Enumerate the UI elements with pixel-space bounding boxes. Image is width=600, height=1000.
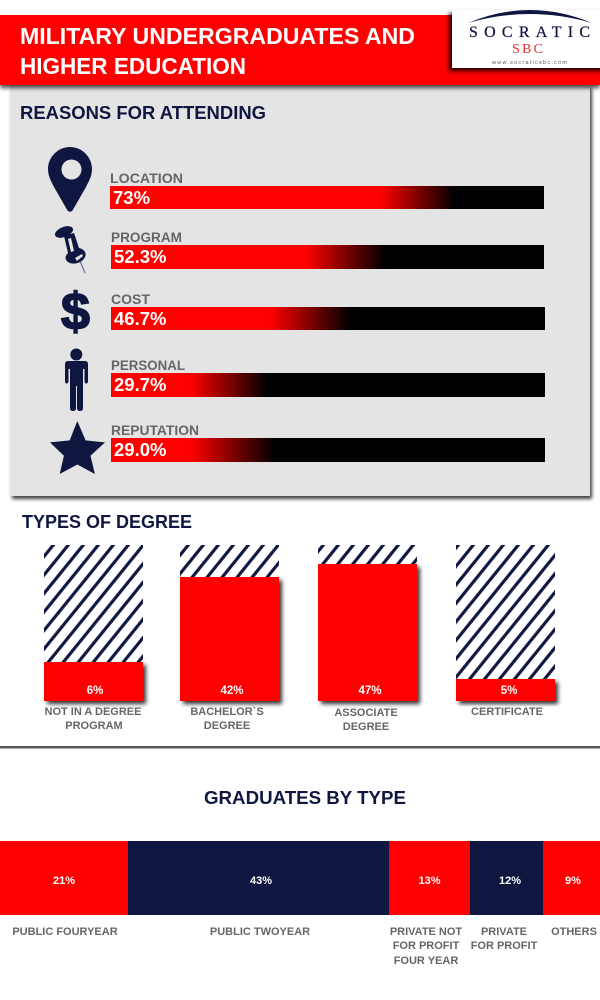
segment: others [543,841,600,938]
segment: private for profit: 12% [499,875,521,887]
label: cost: COST [111,292,151,307]
chart: graduates by type [0,841,600,967]
column: certificate: CERTIFICATE [471,706,543,718]
icon: person [65,348,88,411]
segment: public two-year [128,841,389,938]
column: not in a degree program [44,545,143,732]
value: 73%: 73% [113,187,150,208]
column: bachelor's degree: BACHELOR`S [190,706,264,718]
icon: dollar sign: $ [61,283,90,341]
logo: Socratic SBC [452,10,600,68]
column: associate degree [318,545,417,733]
heading: types of degree: TYPES OF DEGREE [22,512,192,532]
title: HIGHER EDUCATION [20,53,246,79]
value: 52.3%: 52.3% [114,246,166,267]
segment: others: OTHERS [551,926,597,938]
label: reputation: REPUTATION [111,423,199,438]
bar: location 73% [110,186,544,209]
column: bachelor's degree: 42% [220,685,244,697]
segment: others: 9% [565,875,581,887]
label: location: LOCATION [110,171,183,186]
icon: push pin [53,224,86,273]
chart: types of degree [44,545,555,733]
value: 29.7%: 29.7% [114,374,166,395]
column: not in a degree program: 6% [87,685,103,697]
heading: reasons for attending: REASONS FOR ATTENDING [20,103,266,123]
column: certificate: 5% [501,685,517,697]
logo: Socratic SBC: SBC [512,42,543,57]
segment: private not for profit four year: FOR PROFIT [393,940,460,952]
bar: personal 29.7% [111,373,545,397]
segment: private not for profit four year: FOUR YEAR [394,955,458,967]
segment: public four-year: PUBLIC FOURYEAR [12,926,118,938]
column: associate degree: DEGREE [343,721,389,733]
bar: cost 46.7% [111,307,545,330]
label: program: PROGRAM [111,230,182,245]
segment: public four-year [0,841,128,938]
header banner [0,15,600,85]
column: not in a degree program: NOT IN A DEGREE [45,706,141,718]
column: associate degree: ASSOCIATE [334,707,398,719]
value: 46.7%: 46.7% [114,308,166,329]
panel: reasons for attending [10,85,590,496]
icon: location pin [48,147,92,212]
column: certificate [456,545,555,718]
segment: private not for profit four year [389,841,470,967]
title: MILITARY UNDERGRADUATES AND [20,23,415,49]
bar: program 52.3% [111,245,544,269]
value: 29.0%: 29.0% [114,439,166,460]
heading: graduates by type: GRADUATES BY TYPE [204,788,406,808]
column: bachelor's degree [180,545,279,732]
segment: private not for profit four year: PRIVATE NOT [390,926,462,938]
segment: private for profit: FOR PROFIT [471,940,538,952]
column: not in a degree program: PROGRAM [65,720,123,732]
segment: public two-year: 43% [250,875,272,887]
label: personal: PERSONAL [111,358,185,373]
bar: reputation 29.0% [111,438,545,462]
column: bachelor's degree: DEGREE [204,720,250,732]
icon: star [50,421,105,474]
segment: private for profit: PRIVATE [481,926,527,938]
logo: Socratic SBC: www.socraticsbc.com [491,60,567,66]
logo: Socratic SBC: SOCRATIC [469,24,590,41]
segment: public four-year: 21% [53,875,75,887]
segment: private not for profit four year: 13% [418,875,441,887]
segment: private for profit [470,841,543,952]
column: associate degree: 47% [358,685,382,697]
segment: public two-year: PUBLIC TWOYEAR [210,926,310,938]
